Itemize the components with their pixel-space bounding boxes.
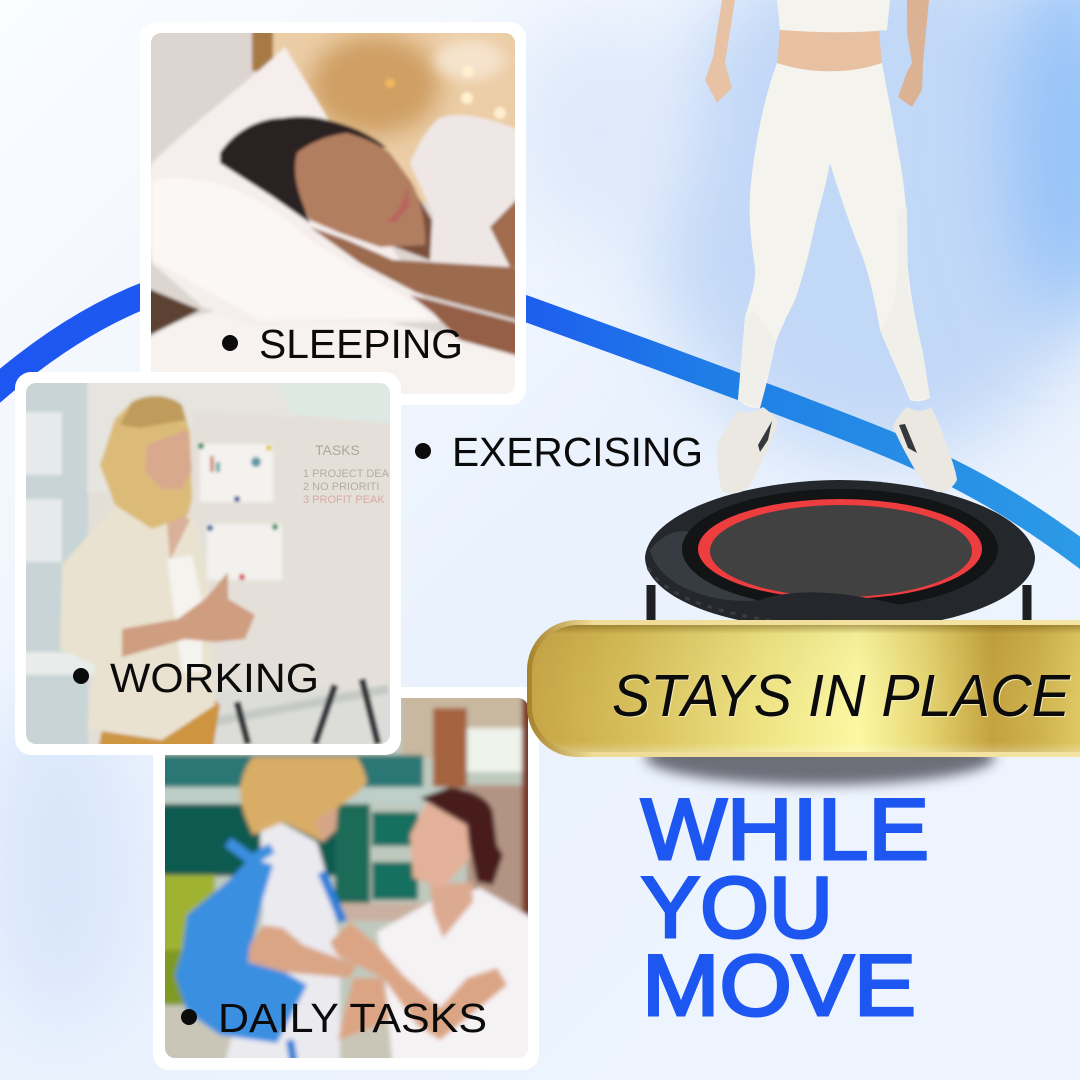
working photo [26,383,390,744]
panel: daily tasks photo card [153,687,539,1070]
leggings [738,63,930,408]
headline [641,782,929,1034]
daily tasks photo [165,698,528,1058]
blue arc [0,272,1080,564]
gold banner: STAYS IN PLACE [613,664,1072,730]
headline: MOVE [642,938,916,1034]
crop top [777,0,890,32]
trampoline [645,480,1035,630]
working photo: 3 PROFIT PEAK [303,494,385,506]
label: daily tasks: DAILY TASKS [218,995,487,1041]
trampoline legs [651,585,1027,622]
photo: woman on trampoline [645,0,1035,630]
working photo: TASKS [315,442,360,458]
working photo: 2 NO PRIORITI [303,481,379,493]
label: working: WORKING [110,655,319,701]
shoes [717,407,957,494]
label: sleeping: SLEEPING [259,321,463,367]
label: exercising: EXERCISING [452,429,703,475]
gold banner shadow [645,729,995,785]
arms [705,0,735,103]
panel: sleeping photo card [140,22,526,405]
headline: YOU [641,860,833,956]
midriff [777,28,882,74]
panel: working photo card [15,372,401,755]
headline: WHILE [641,782,929,878]
working photo: 1 PROJECT DEAL [303,468,395,480]
gold banner [527,620,1080,757]
sleeping photo [151,33,515,394]
banner text: STAYS IN PLACE [612,663,1071,729]
